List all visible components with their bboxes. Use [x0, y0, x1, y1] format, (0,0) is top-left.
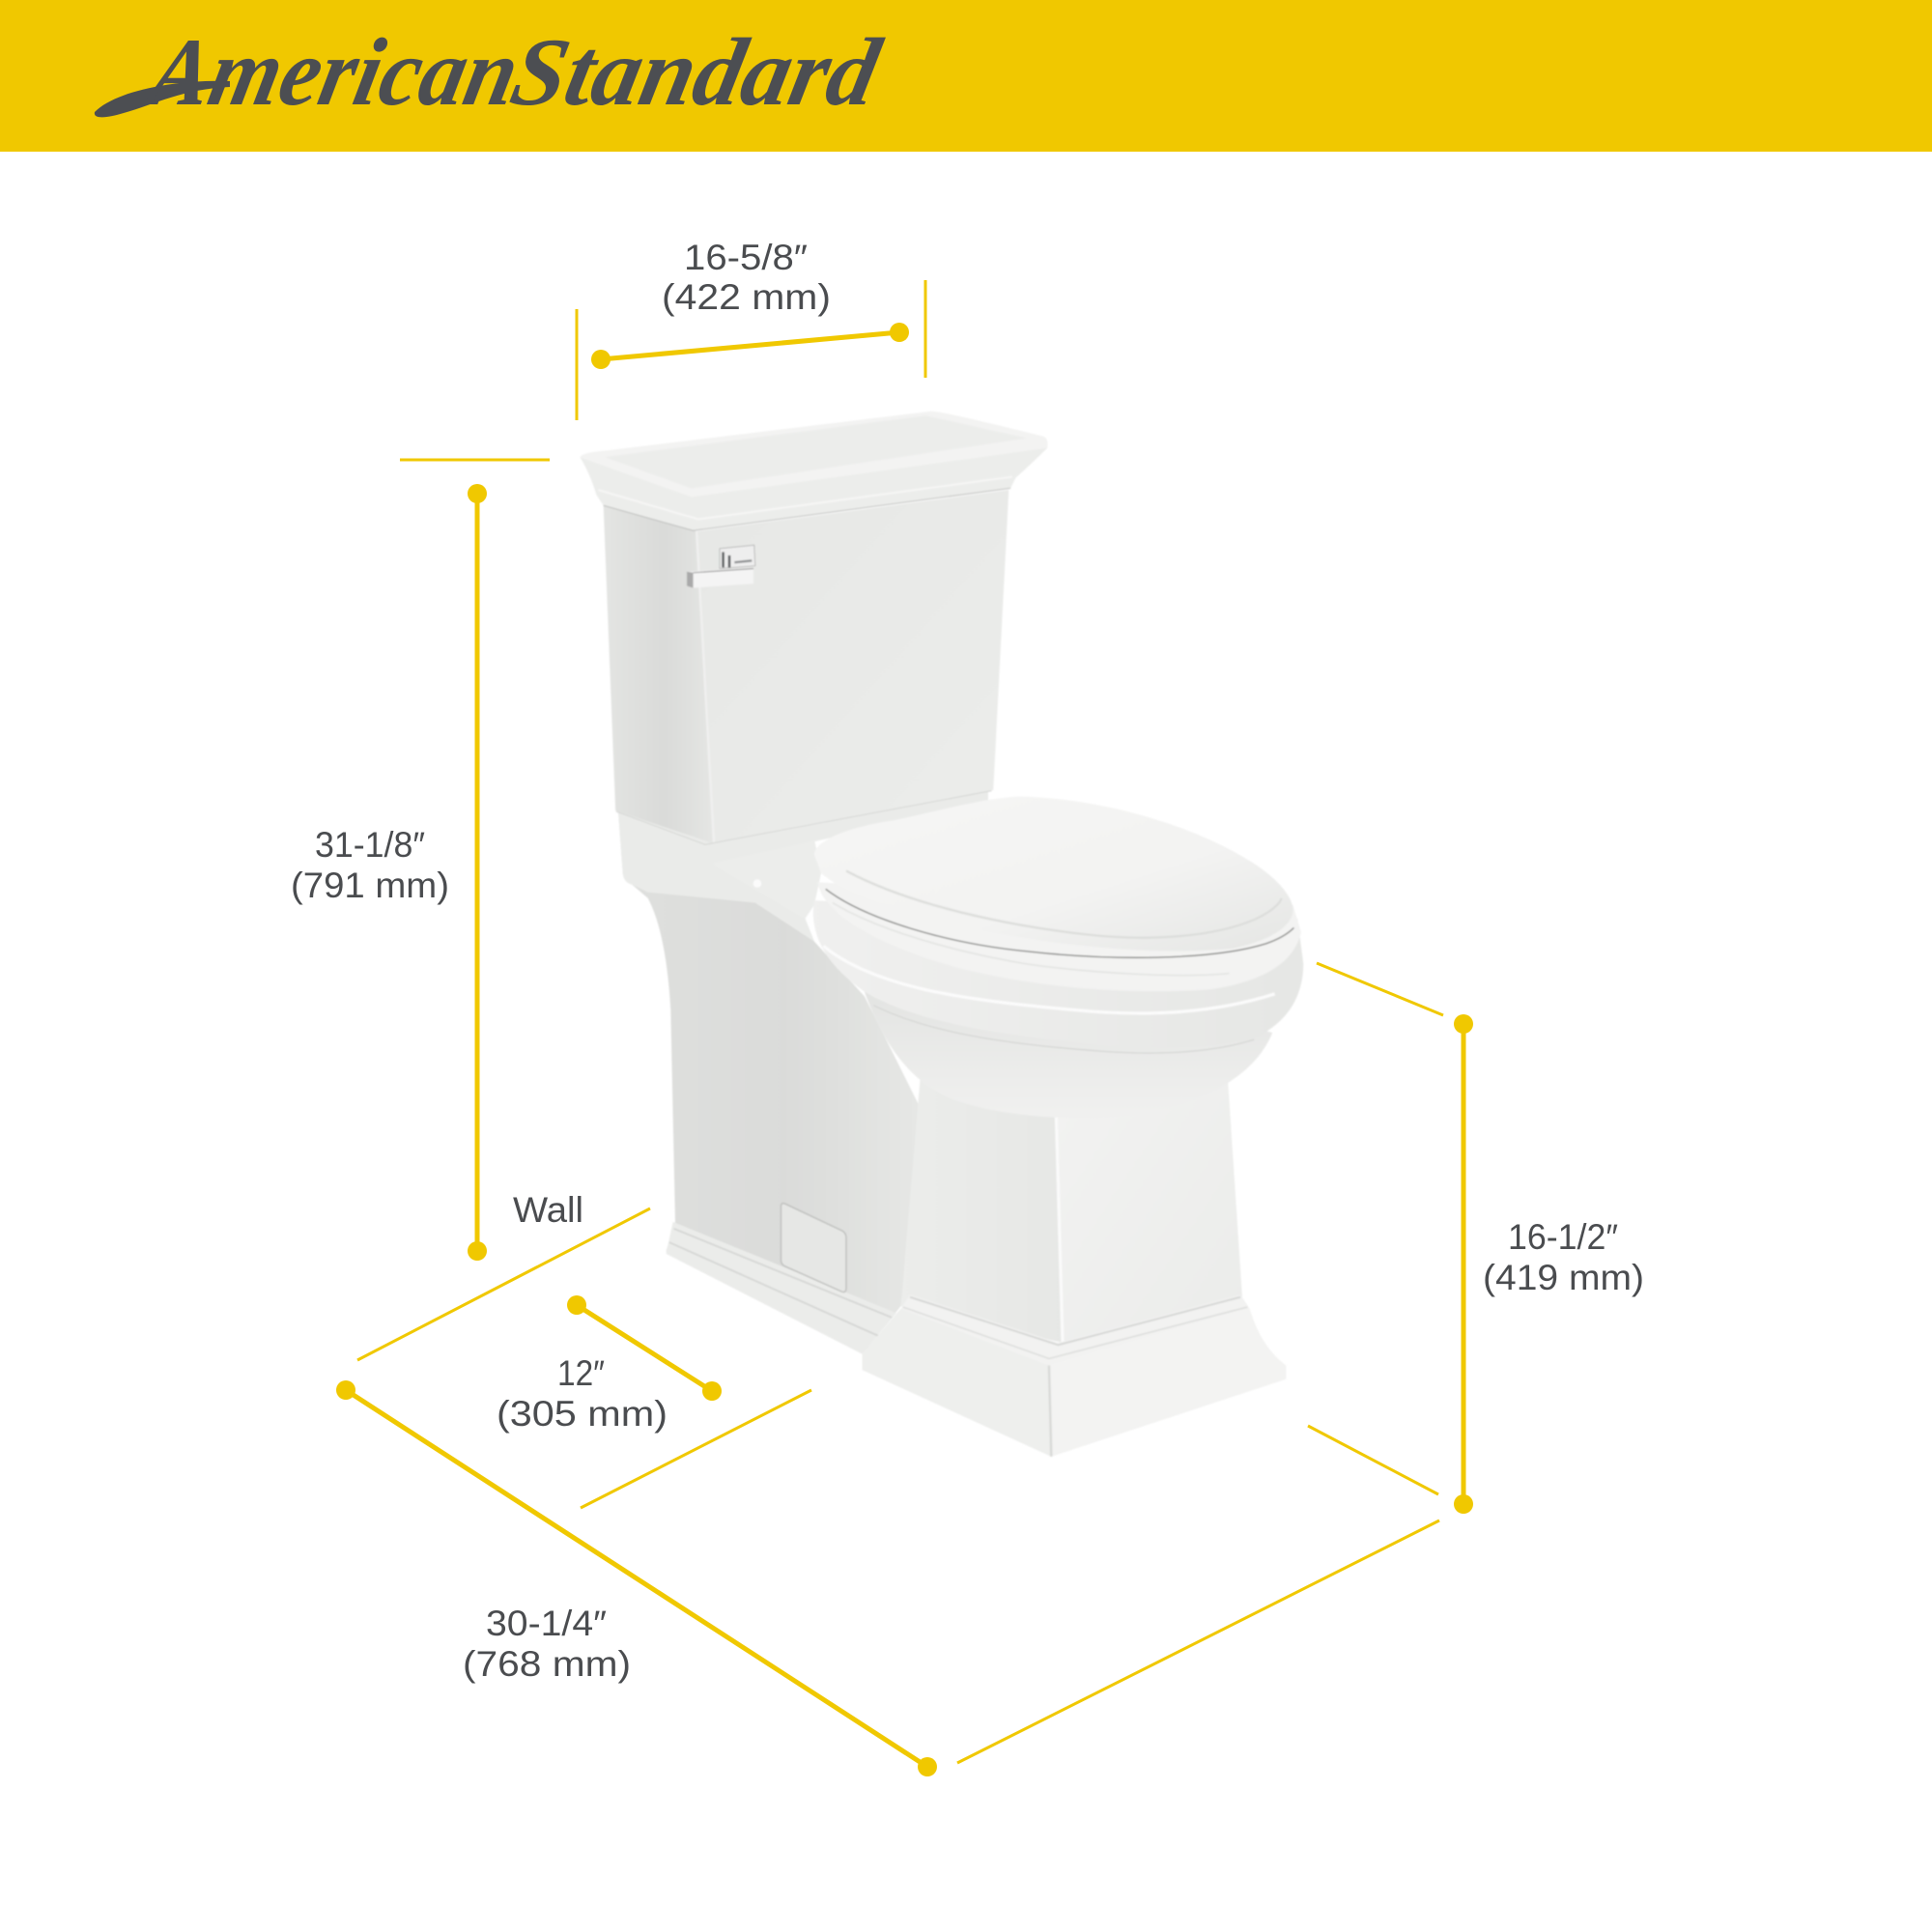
logo: American Standard — [95, 18, 890, 126]
logo: American Standard: Standard — [502, 18, 890, 126]
dimension: overall height 31-1/8 — [291, 460, 550, 1261]
dimension: overall depth 30-1/4: (768 mm) — [463, 1644, 631, 1684]
dimension: overall height 31-1/8: 31-1/8″ — [315, 825, 425, 865]
dimension: overall depth 30-1/4: 30-1/4″ — [486, 1604, 607, 1643]
tank lid top — [580, 412, 1047, 497]
dimension: overall height 31-1/8: (791 mm) — [291, 866, 449, 905]
dimension: tank width 16-5/8 — [577, 238, 925, 420]
logo: American Standard: American — [135, 18, 528, 126]
tank side — [604, 505, 714, 843]
tank lid flare — [580, 448, 1047, 530]
foot molding — [901, 1294, 1250, 1365]
toilet body side — [618, 811, 922, 1354]
lid — [814, 797, 1293, 951]
bowl and seat — [813, 797, 1303, 1118]
dimension: rim height 16-1/2 — [1308, 963, 1644, 1514]
tank deck — [707, 838, 821, 919]
dimension: tank width 16-5/8: (422 mm) — [662, 277, 831, 317]
rim — [813, 900, 1303, 1048]
foot — [862, 1308, 1051, 1457]
dimension: tank width 16-5/8: 16-5/8″ — [684, 238, 808, 277]
tank front — [696, 490, 1009, 843]
dimension: overall depth 30-1/4 — [336, 1380, 1439, 1776]
dimension: rim height 16-1/2: (419 mm) — [1483, 1258, 1644, 1297]
dimension: rough-in 12: 12″ — [557, 1353, 605, 1393]
seat — [817, 882, 1301, 991]
access panel — [781, 1204, 846, 1292]
plinth molding — [667, 1222, 896, 1354]
dimension: rim height 16-1/2: 16-1/2″ — [1508, 1217, 1618, 1257]
tank — [580, 412, 1047, 865]
dimension: rough-in 12: (305 mm) — [497, 1394, 668, 1434]
flush handle — [687, 545, 755, 588]
label: wall: Wall — [513, 1190, 583, 1230]
header band — [0, 0, 1932, 152]
dimension: rough-in 12 — [357, 1208, 811, 1508]
toilet illustration — [580, 412, 1303, 1457]
pedestal — [862, 1065, 1286, 1457]
bowl — [865, 978, 1272, 1118]
